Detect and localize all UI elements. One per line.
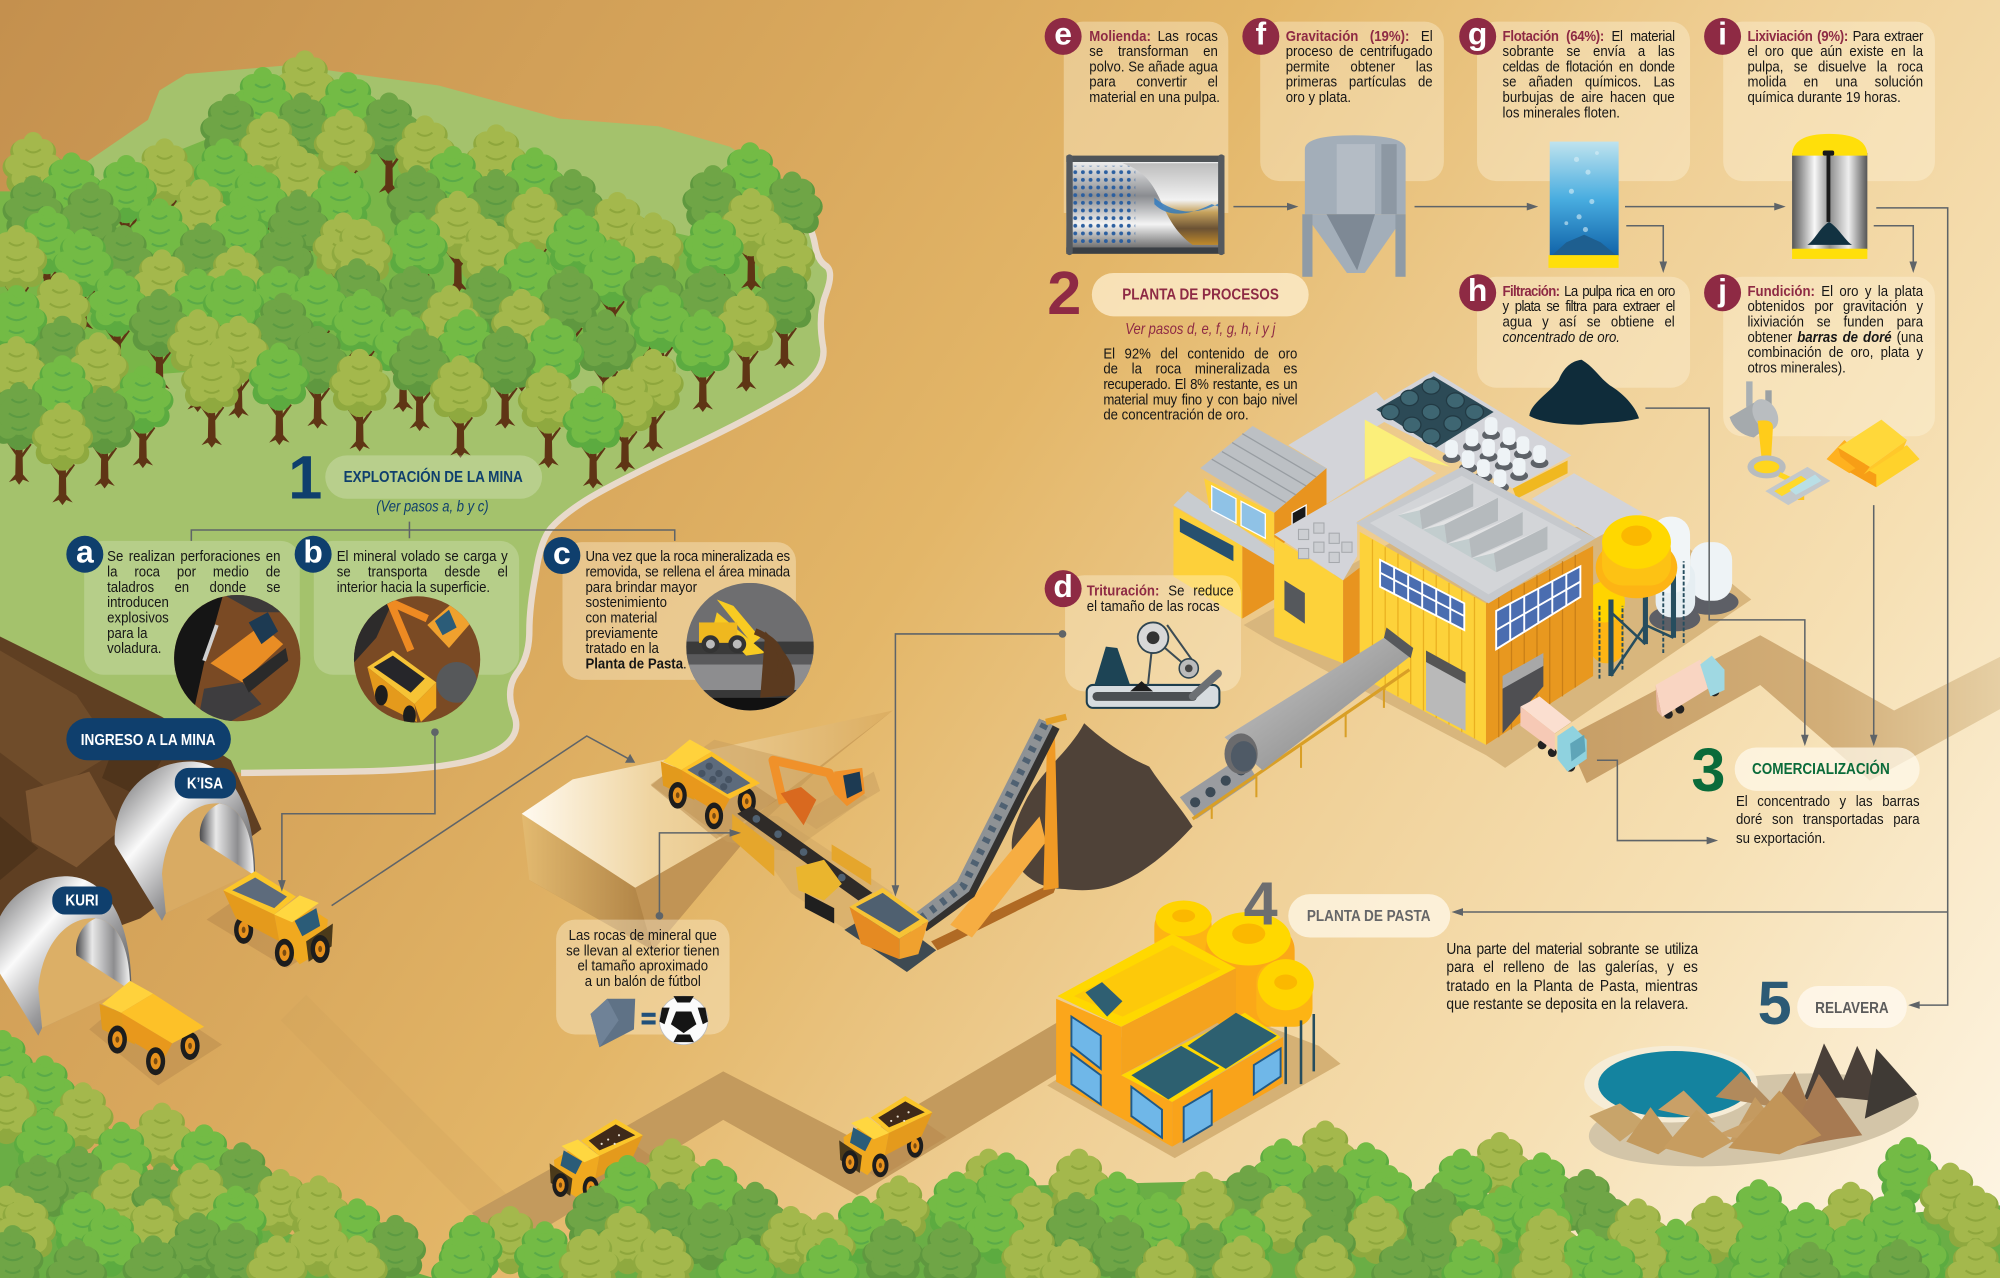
text: paste plant: que restante se deposita en la relavera. [1446, 995, 1688, 1013]
heading 1 pill: EXPLOTACIÓN DE LA MINA [344, 468, 523, 486]
text a [107, 550, 280, 657]
text d [1086, 584, 1234, 615]
text j: lixiviación se funden para [1747, 315, 1923, 330]
text: ore size: Las rocas de mineral que [569, 929, 717, 944]
paste plant [1047, 901, 1341, 1158]
connector lines [191, 203, 1948, 1009]
text c: removida, se rellena el área minada [585, 565, 790, 580]
heading 2 pill: PLANTA DE PROCESOS [1122, 286, 1279, 304]
text c: Una vez que la roca mineralizada es [585, 550, 790, 565]
text a: para la [107, 626, 148, 642]
badge c [543, 537, 580, 574]
text h [1502, 284, 1675, 346]
label: K'ISA [175, 768, 236, 798]
badge a [66, 536, 103, 573]
mountain with mine entrance [0, 636, 261, 969]
text: paste plant: Una parte del material sobrante se utiliza [1446, 940, 1698, 958]
road to paste plant [281, 995, 1071, 1256]
white tanks [1649, 517, 1739, 631]
text h: y plata se filtra para extraer el [1503, 300, 1675, 315]
lower forest base [0, 1129, 434, 1278]
badge i: i [1718, 17, 1727, 52]
badge h [1459, 274, 1496, 311]
heading 2 numeral: 2 [1047, 260, 1081, 328]
heading 4 pill: PLANTA DE PASTA [1307, 907, 1431, 925]
label: KURI [52, 886, 112, 915]
heading 2 pill [1092, 273, 1309, 316]
badge f: f [1256, 17, 1266, 52]
panel i: leaching [1723, 22, 1935, 181]
heading 1 note: (Ver pasos a, b y c) [376, 497, 489, 515]
back block with fans [1365, 371, 1571, 499]
text: ore size: se llevan al exterior tienen [566, 944, 719, 959]
text f [1286, 29, 1433, 106]
text: paste plant [1446, 940, 1698, 1013]
grey gable wing [1173, 426, 1327, 619]
ore pile [1012, 723, 1193, 890]
text c: con material [585, 611, 657, 626]
tunnel K'ISA [115, 761, 255, 921]
badge g: g [1468, 17, 1487, 52]
open pit wedge [522, 710, 893, 950]
badge g [1459, 18, 1496, 55]
mid block [1274, 457, 1436, 676]
text e: Molienda: Las rocas [1089, 29, 1218, 45]
badge c: c [553, 536, 571, 571]
text a: Se realizan perforaciones en [107, 550, 280, 565]
factory shadow [1244, 523, 1751, 768]
delivery truck 2 [1656, 656, 1724, 719]
text g [1502, 29, 1675, 121]
label: mine entrance [66, 718, 231, 760]
text: plant recovery: de concentración de oro. [1103, 408, 1249, 423]
panel g: flotation [1477, 22, 1690, 181]
text g: celdas de flotación en donde [1503, 60, 1675, 75]
text i [1747, 29, 1924, 106]
text i: química durante 19 horas. [1747, 91, 1901, 106]
label: mine entrance: INGRESO A LA MINA [81, 730, 216, 748]
lower forest [0, 1030, 2000, 1278]
right flat roof [1532, 473, 1643, 538]
upper forest [0, 50, 823, 505]
panel a: drilling [84, 541, 300, 675]
text c: sostenimiento [585, 596, 667, 611]
badge e [1045, 18, 1082, 55]
text d: el tamaño de las rocas [1087, 599, 1220, 615]
heading 4 pill [1288, 894, 1450, 937]
tunnel KURI [0, 876, 131, 1036]
text: plant recovery: de la roca mineralizada es [1103, 362, 1297, 378]
text j: obtener barras de doré (una [1747, 330, 1923, 346]
badge b: b [303, 534, 323, 570]
panel: ore size note [556, 920, 730, 1034]
text f: proceso de centrifugado [1286, 45, 1433, 60]
text f: Gravitación (19%): El [1286, 29, 1433, 45]
text f: oro y plata. [1286, 91, 1351, 106]
icon: flotation cell [1548, 142, 1619, 268]
icon: drilling circle [173, 594, 301, 722]
text: paste plant: para el relleno de las galerías, y es [1446, 958, 1698, 976]
ore truck on road right [839, 1096, 946, 1178]
main block [1356, 467, 1596, 745]
text g: se añaden químicos. Las [1503, 75, 1675, 91]
text g: Flotación (64%): El material [1503, 29, 1675, 45]
text a: voladura. [107, 642, 161, 657]
dump truck at pit [651, 740, 777, 839]
badge b [295, 536, 332, 573]
label: K'ISA: K’ISA [187, 774, 223, 792]
loaded dump truck leaving tunnel [207, 871, 333, 968]
ore truck on road left [550, 1119, 657, 1201]
text: commercialization: El concentrado y las barras [1736, 795, 1920, 810]
text a: la roca por medio de [107, 565, 280, 580]
icon: gold pour [1730, 381, 1830, 505]
yellow tanks [1584, 515, 1684, 679]
text h: Filtración: La pulpa rica en oro [1503, 284, 1675, 300]
paste plant tanks [1154, 901, 1295, 1027]
text: paste plant: tratado en la Planta de Pasta, mientras [1446, 977, 1698, 995]
badge a: a [76, 534, 94, 570]
panel b: hauling [314, 541, 519, 675]
tailings deposit [1584, 1043, 1923, 1180]
text a: introducen [107, 596, 169, 611]
feed conveyor [732, 806, 893, 944]
icon: gold concentrate pile [1529, 360, 1639, 425]
text e [1089, 29, 1220, 106]
road from processing plant [1566, 635, 2000, 783]
badge e: e [1054, 17, 1072, 52]
text i: pulpa, se disuelve la roca [1747, 60, 1923, 75]
text: plant recovery: El 92% del contenido de oro [1103, 347, 1297, 362]
text f: primeras partículas de [1286, 75, 1433, 91]
heading 3 pill [1735, 747, 1920, 791]
badge j [1704, 274, 1741, 311]
stacker conveyor [921, 717, 1066, 950]
icon: ball mill [1066, 154, 1224, 255]
delivery truck 1 [1520, 696, 1587, 772]
heading 1 numeral: 1 [288, 445, 322, 513]
text g: sobrante se envía a las [1503, 45, 1675, 60]
text j [1747, 284, 1924, 376]
text g: burbujas de aire hacen que [1503, 91, 1675, 106]
badge j: j [1718, 273, 1727, 309]
text c: previamente [585, 626, 658, 642]
conveyor tube to plant [1180, 628, 1413, 819]
text j: obtenidos por gravitación y [1747, 300, 1923, 315]
processing plant [1173, 371, 1739, 745]
text e: polvo. Se añade agua [1089, 60, 1218, 75]
text: plant recovery [1103, 347, 1297, 423]
heading 5 numeral: 5 [1758, 971, 1792, 1038]
text e: para convertir el [1089, 75, 1218, 91]
text d: Trituración: Se reduce [1087, 584, 1234, 599]
heading 1 pill [325, 455, 542, 499]
badge i [1704, 18, 1741, 55]
panel j: smelting [1723, 277, 1935, 436]
text: ore size: a un balón de fútbol [585, 974, 701, 990]
text c: Planta de Pasta. [585, 657, 687, 672]
foreground icons and connectors [174, 134, 1948, 1048]
text e: material en una pulpa. [1089, 91, 1220, 106]
label: KURI: KURI [66, 892, 99, 909]
text b: El mineral volado se carga y [337, 550, 508, 565]
text j: combinación de oro, plata y [1747, 346, 1923, 361]
panel c: backfill [562, 542, 796, 680]
empty dump truck [89, 981, 222, 1085]
badge d [1045, 570, 1082, 607]
text b: interior hacia la superficie. [337, 580, 490, 596]
lower forest base right [536, 1180, 2000, 1278]
heading 3 numeral: 3 [1691, 737, 1725, 805]
text a: taladros en donde se [107, 580, 280, 596]
panel f: gravity [1260, 22, 1444, 181]
text e: se transforman en [1089, 45, 1218, 60]
text h: concentrado de oro. [1503, 330, 1620, 346]
heading 2 note: Ver pasos d, e, f, g, h, i y j [1125, 320, 1275, 338]
text i: el oro que aún existe en la [1747, 45, 1923, 60]
text g: los minerales floten. [1503, 106, 1620, 121]
text f: permite obtener las [1286, 60, 1433, 75]
hopper [844, 888, 936, 972]
panel d: crushing [1065, 575, 1241, 691]
text h: agua y así se obtiene el [1503, 315, 1675, 330]
text b: se transporta desde el [337, 565, 508, 580]
heading 4 numeral: 4 [1244, 871, 1278, 939]
badge f [1242, 18, 1279, 55]
heading 3 pill: COMERCIALIZACIÓN [1752, 760, 1890, 778]
text i: Lixiviación (9%): Para extraer [1747, 29, 1923, 45]
text: commercialization: su exportación. [1736, 831, 1826, 847]
panel e: milling [1064, 22, 1228, 213]
icon: crusher [1087, 622, 1219, 708]
text i: molida en una solución [1747, 75, 1923, 91]
icon: leaching tank [1792, 134, 1867, 259]
text b [337, 550, 508, 596]
back flat roof [1288, 392, 1397, 504]
text c: para brindar mayor [585, 580, 697, 596]
badge h: h [1468, 273, 1487, 309]
text j: otros minerales). [1747, 361, 1846, 376]
text: ore size: el tamaño aproximado [577, 959, 708, 974]
excavator [773, 760, 880, 829]
icon: hauling circle [353, 596, 481, 726]
forest understory patch [0, 108, 797, 376]
badge d: d [1053, 569, 1073, 605]
text: commercialization: doré son transportadas para [1736, 813, 1920, 828]
heading 5 pill: RELAVERA [1815, 998, 1889, 1016]
text c [585, 550, 790, 672]
shadow under truck and excavator [651, 740, 867, 852]
text: ore size [566, 929, 719, 990]
green hillside [0, 65, 830, 773]
icon: gold bars [1827, 420, 1920, 487]
icon: backfill circle [686, 583, 814, 710]
heading 5 pill [1797, 986, 1907, 1028]
text a: explosivos [107, 611, 169, 626]
icon: rock equals ball [591, 996, 708, 1047]
text c: tratado en la [585, 642, 659, 657]
text: plant recovery: recuperado. El 8% restante, es un [1103, 378, 1297, 393]
text: plant recovery: material muy fino y con bajo nivel [1103, 393, 1297, 408]
text j: Fundición: El oro y la plata [1747, 284, 1923, 300]
icon: gravity silo [1302, 135, 1406, 277]
text: commercialization [1736, 795, 1920, 847]
panel h: filtration [1477, 277, 1690, 388]
